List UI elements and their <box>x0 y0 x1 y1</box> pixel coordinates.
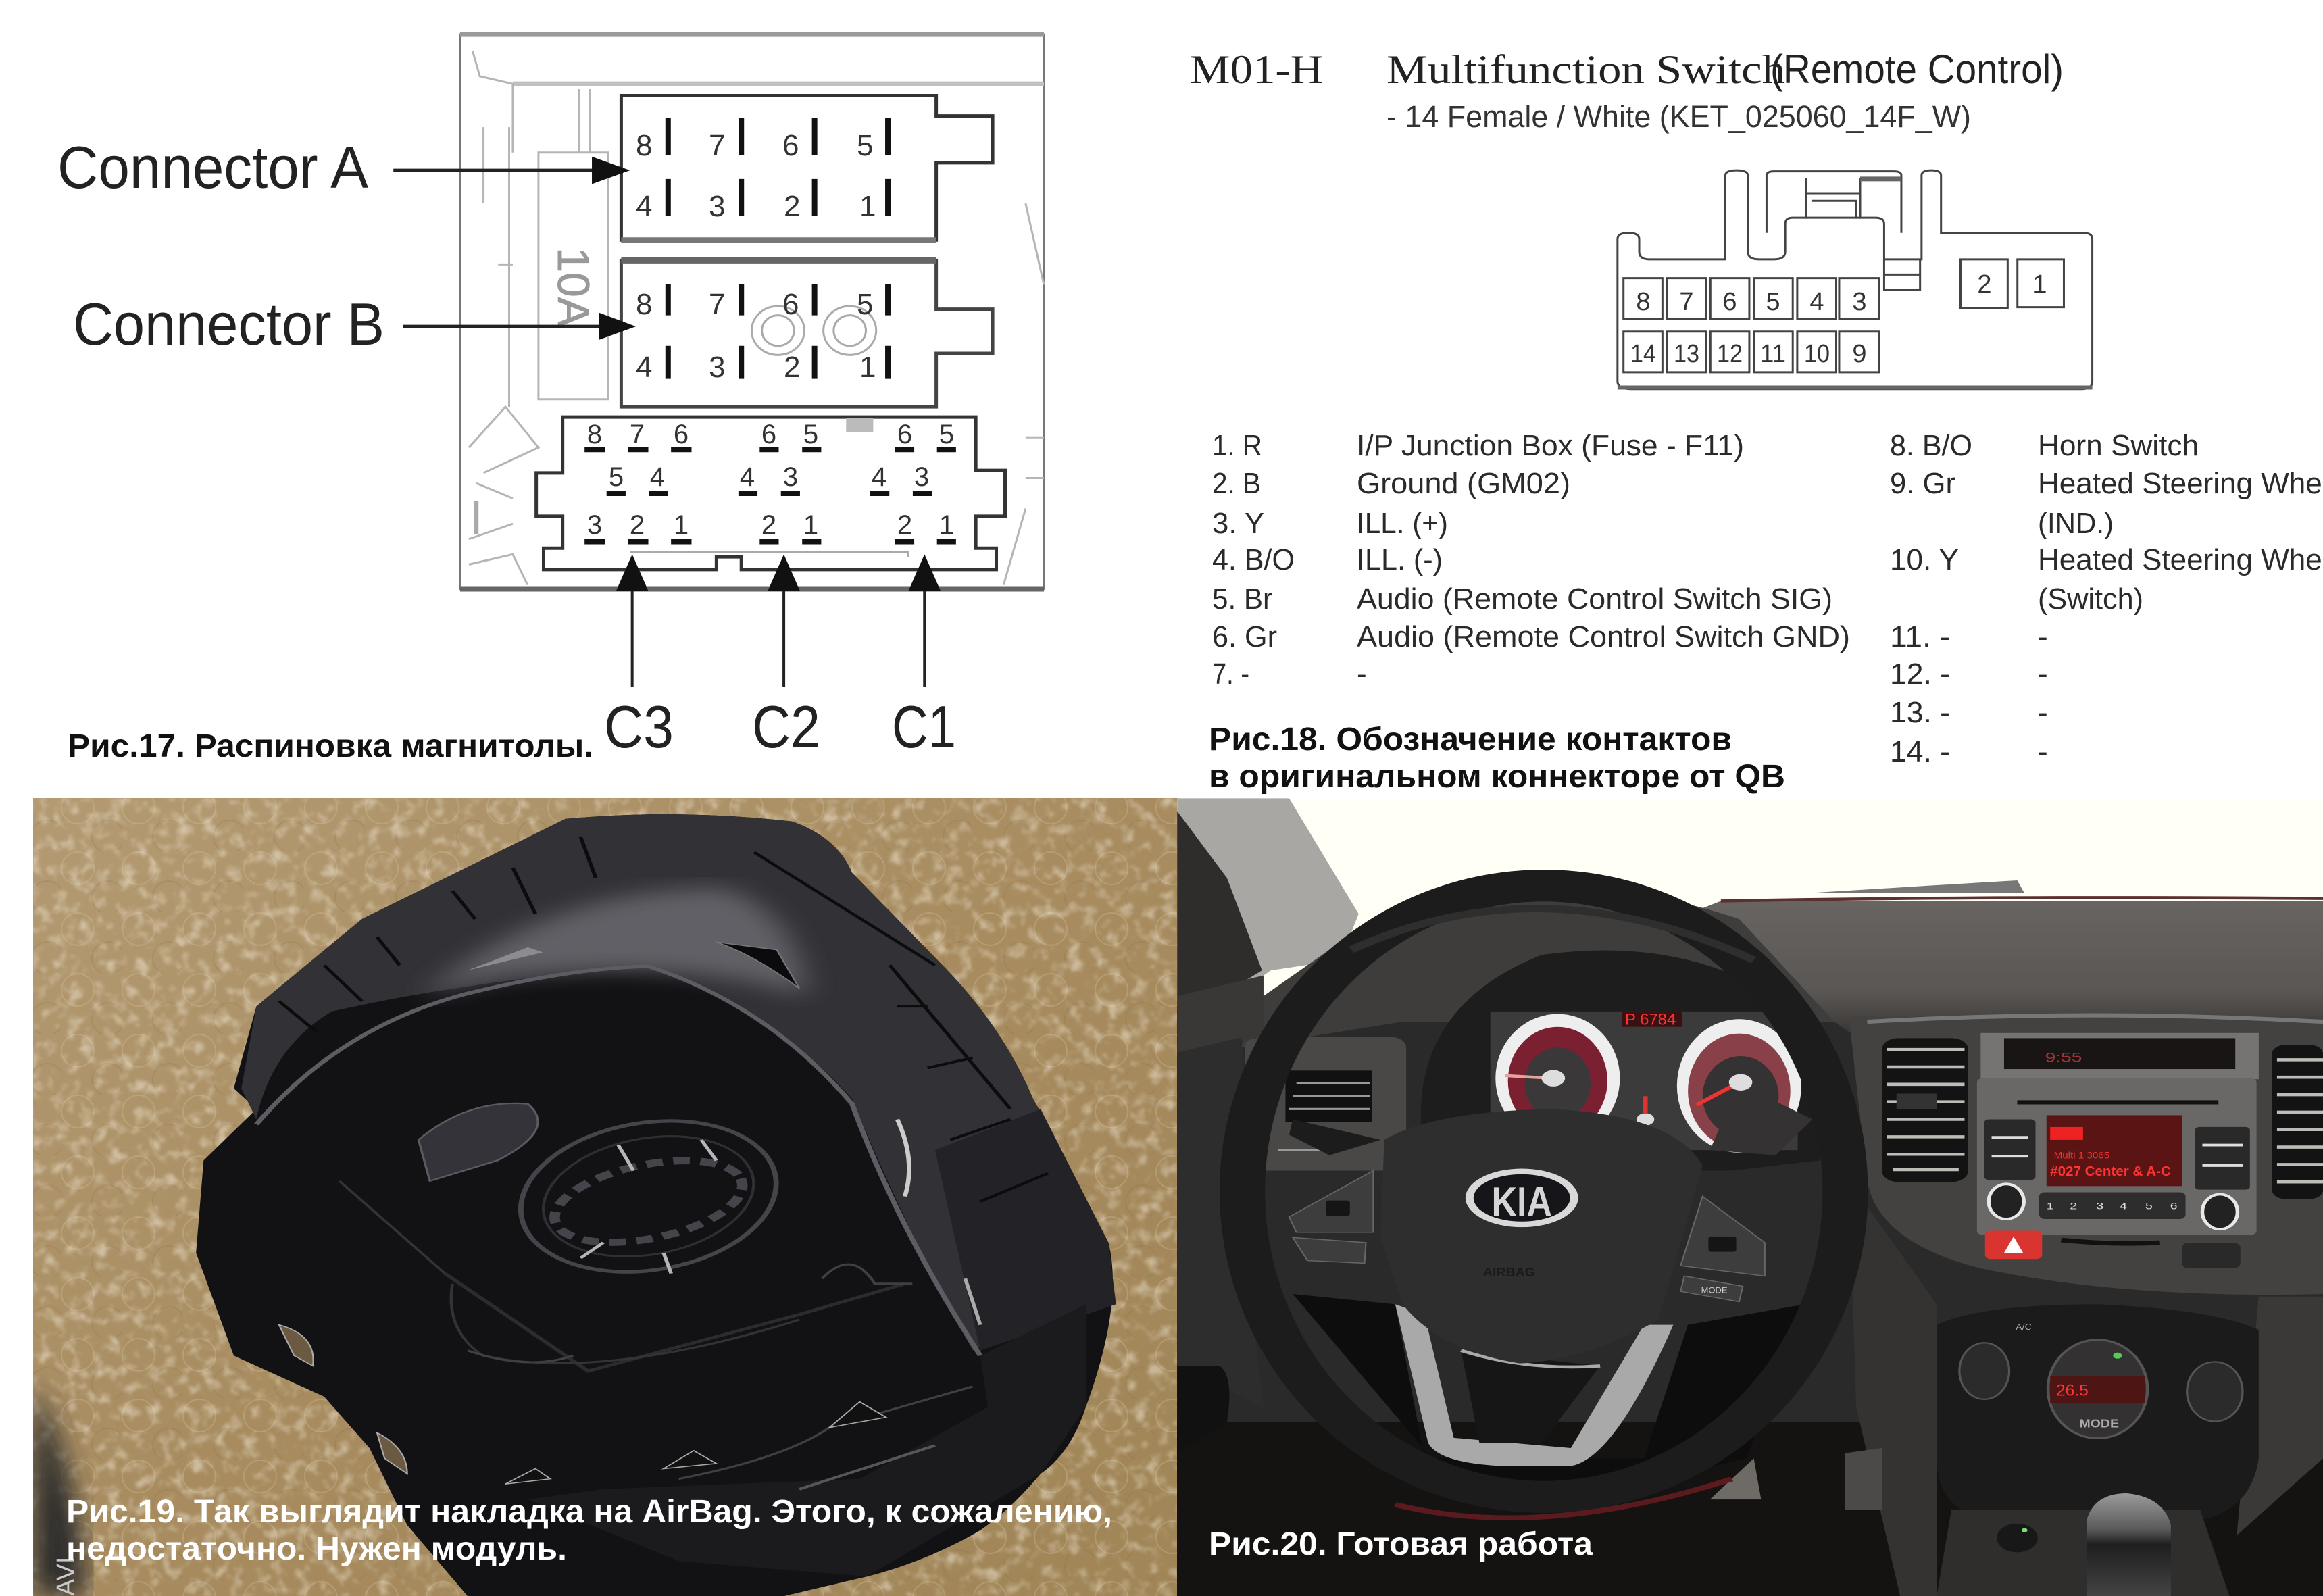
steering wheel hub <box>1289 1109 1765 1466</box>
radio head unit: 2 <box>2070 1201 2077 1212</box>
terminal numbers: 11 <box>1760 340 1786 368</box>
pin table: right column: Horn Switch <box>2038 429 2199 462</box>
climate control panel: A/C <box>2016 1322 2032 1332</box>
arrow: C2 <box>768 554 800 687</box>
console sides <box>1849 1181 1937 1596</box>
instrument binnacle <box>1421 951 1823 1171</box>
connector face diagram <box>1618 170 2093 389</box>
odometer display: P 6784 <box>1625 1011 1676 1029</box>
terminal numbers: 5 <box>1766 288 1780 316</box>
panel: photo of finished dashboard <box>1176 798 2323 1596</box>
connector C pin numbers: 4 <box>872 462 886 492</box>
connector A pin numbers: 2 <box>784 190 800 223</box>
pin table: right column: (IND.) <box>2038 507 2114 540</box>
heading: connector code: M01-H <box>1190 47 1323 92</box>
terminal numbers: 6 <box>1722 288 1737 316</box>
radio head unit: Multi 1 3065 <box>2054 1151 2109 1161</box>
pin table: right column: 12. - <box>1890 657 1950 691</box>
connector A pin numbers: 3 <box>709 190 725 223</box>
pin table: right column: (Switch) <box>2038 582 2143 616</box>
pin table: right column: - <box>2038 696 2048 729</box>
terminal numbers <box>1630 270 2047 368</box>
connector C pin numbers: 6 <box>674 420 689 449</box>
connector B pin numbers: 3 <box>709 351 725 384</box>
arrow: Connector A <box>393 157 630 184</box>
pin table: left column: I/P Junction Box (Fuse - F11) <box>1357 429 1744 462</box>
terminal numbers: 3 <box>1852 288 1867 316</box>
heading: connector name <box>1387 47 2064 92</box>
heading: connector name: Multifunction Switch <box>1387 47 1785 92</box>
radio head unit: 3 <box>2096 1201 2103 1212</box>
connector housing drawing <box>460 34 1044 589</box>
mounting slots <box>279 1325 886 1484</box>
door panel <box>1177 976 1264 1053</box>
terminal numbers: 14 <box>1630 340 1656 368</box>
pin table: left column: Audio (Remote Control Switch SIG) <box>1357 582 1832 616</box>
subheading: connector type: - 14 Female / White (KET_025060_14F_W) <box>1387 99 1971 134</box>
label: C3: C3 <box>604 693 674 760</box>
connector A pin numbers: 4 <box>636 190 652 223</box>
caption: figure 18: в оригинальном коннекторе от QB <box>1209 759 1785 795</box>
pin table: right column: - <box>2038 620 2048 653</box>
connector C pin numbers: 2 <box>630 510 645 540</box>
caption: figure 20: Рис.20. Готовая работа <box>1209 1526 1593 1562</box>
pin table: left column: ILL. (+) <box>1357 507 1448 540</box>
tachometer <box>1495 1014 1620 1115</box>
connector A pin numbers <box>636 129 876 223</box>
photo background: bubble wrap <box>33 798 1178 1596</box>
connector C pin numbers: 1 <box>674 510 689 540</box>
pin table: left column: 3. Y <box>1212 507 1264 540</box>
connector B pin numbers <box>636 288 876 384</box>
pin table: left column <box>1212 429 1850 691</box>
heading: connector name: (Remote Control) <box>1770 47 2064 92</box>
pin table: right column: 8. B/O <box>1890 429 1972 462</box>
pin table: left column: 5. Br <box>1212 582 1272 616</box>
dashboard top <box>1688 901 2323 1032</box>
connector B pin numbers: 6 <box>782 288 799 321</box>
terminal numbers: 2 <box>1977 270 1992 299</box>
airbag cover plastic shell <box>196 814 1116 1596</box>
connector C pin numbers: 2 <box>897 510 912 540</box>
radio head unit: 4 <box>2120 1201 2127 1212</box>
arrow: C3 <box>616 554 649 687</box>
radio head unit: 9:55 <box>2045 1050 2082 1065</box>
lower wheel well <box>1293 1294 1805 1505</box>
pin table: left column: 7. - <box>1212 657 1249 691</box>
caption: figure 19 <box>66 1494 1112 1567</box>
pin table: right column: 14. - <box>1890 735 1950 768</box>
hazard button <box>1985 1230 2042 1259</box>
terminal numbers: 9 <box>1852 340 1867 368</box>
climate control panel: MODE <box>2080 1416 2119 1430</box>
terminal numbers: 1 <box>2032 270 2047 299</box>
pin table: right column: 9. Gr <box>1890 467 1955 500</box>
pin table: right column: - <box>2038 657 2048 691</box>
connector C pin numbers: 3 <box>914 462 929 492</box>
arrow: C1 <box>908 554 941 687</box>
pin table: right column: 10. Y <box>1890 543 1959 576</box>
connector B pin numbers: 7 <box>709 288 725 321</box>
pin table: left column: Ground (GM02) <box>1357 467 1570 500</box>
gear shifter <box>1937 1493 2230 1596</box>
left vent and stalk <box>1245 1037 1406 1171</box>
pin table: right column <box>1890 429 2323 768</box>
connector C pin numbers: 7 <box>630 420 645 449</box>
radio head unit: #027 Center & A-C <box>2050 1164 2171 1179</box>
label: Connector B: Connector B <box>73 291 384 357</box>
connector B pin numbers: 2 <box>784 351 800 384</box>
connector C pin numbers: 5 <box>939 420 954 449</box>
connector C pin numbers: 1 <box>939 510 954 540</box>
connector C pin numbers: 2 <box>761 510 776 540</box>
label: Connector A: Connector A <box>57 134 368 201</box>
A-pillar <box>1177 798 1359 1006</box>
interior base <box>1177 996 2323 1423</box>
caption: figure 19: Рис.19. Так выглядит накладка на AirBag. Этого, к сожалению, <box>66 1494 1112 1530</box>
watermark corner: AVI <box>52 1557 80 1596</box>
terminal numbers: 8 <box>1636 288 1651 316</box>
pin table: right column: 11. - <box>1890 620 1950 653</box>
connector B pin numbers: 5 <box>857 288 873 321</box>
terminal numbers: 13 <box>1674 340 1699 368</box>
pin table: right column: 13. - <box>1890 696 1950 729</box>
caption: figure 18 <box>1209 722 1785 795</box>
panel: radio pinout diagram <box>57 34 1044 764</box>
smudge mark <box>418 1103 538 1181</box>
climate control panel: 26.5 <box>2056 1382 2089 1399</box>
connector C pin numbers: 1 <box>803 510 818 540</box>
connector A pin numbers: 6 <box>782 129 799 162</box>
AIRBAG mark: AIRBAG <box>1483 1266 1535 1280</box>
terminal numbers: 12 <box>1717 340 1743 368</box>
connector C pin numbers: 4 <box>650 462 665 492</box>
connector A pin numbers: 8 <box>636 129 652 162</box>
connector B pin numbers: 4 <box>636 351 652 384</box>
panel: photo of airbag cover <box>33 798 1178 1596</box>
terminal numbers: 7 <box>1679 288 1694 316</box>
terminal numbers: 10 <box>1804 340 1830 368</box>
connector C pin numbers <box>587 420 954 540</box>
pin table: left column: - <box>1357 657 1367 691</box>
label: C1: C1 <box>892 693 956 760</box>
embossed logo oval <box>518 1119 778 1274</box>
label: C2: C2 <box>752 693 820 760</box>
connector C pin numbers: 4 <box>740 462 755 492</box>
connector C pin numbers: 6 <box>761 420 776 449</box>
windshield sky <box>1177 798 2323 996</box>
pin table: left column: 2. B <box>1212 467 1261 500</box>
pin table: right column: - <box>2038 735 2048 768</box>
pin table: left column: 1. R <box>1212 429 1262 462</box>
console panel <box>1849 1016 2323 1295</box>
connector C pin numbers: 3 <box>783 462 798 492</box>
KIA emblem: KIA <box>1492 1178 1552 1225</box>
pin table: left column: 4. B/O <box>1212 543 1295 576</box>
pin table: left column: 6. Gr <box>1212 620 1277 653</box>
connector C pin numbers: 5 <box>609 462 624 492</box>
pedals and floor <box>1845 1448 1882 1510</box>
radio head unit <box>1977 1033 2259 1235</box>
connector C pin numbers: 5 <box>803 420 818 449</box>
climate control panel <box>1937 1304 2259 1520</box>
pin table: left column: ILL. (-) <box>1357 543 1443 576</box>
connector A pin numbers: 7 <box>709 129 725 162</box>
connector A pin numbers: 5 <box>857 129 873 162</box>
radio head unit: 1 <box>2047 1201 2054 1212</box>
caption: figure 18: Рис.18. Обозначение контактов <box>1209 722 1732 757</box>
radio head unit: 6 <box>2170 1201 2178 1212</box>
KIA emblem <box>1466 1169 1578 1227</box>
connector C pin numbers: 8 <box>587 420 602 449</box>
arrow: Connector B <box>403 313 636 340</box>
pin table: left column: Audio (Remote Control Switch GND) <box>1357 620 1850 653</box>
MODE button label: MODE <box>1701 1286 1728 1295</box>
terminal numbers: 4 <box>1809 288 1824 316</box>
caption: figure 19: недостаточно. Нужен модуль. <box>66 1531 567 1567</box>
caption: figure 17: Рис.17. Распиновка магнитолы. <box>68 728 593 764</box>
fuse label 10A: 10A <box>549 247 599 327</box>
radio head unit: 5 <box>2145 1201 2153 1212</box>
connector A pin numbers: 1 <box>859 190 876 223</box>
connector C pin numbers: 3 <box>587 510 602 540</box>
connector B pin numbers: 1 <box>859 351 876 384</box>
speedometer <box>1677 1019 1812 1155</box>
center vents <box>1882 1038 2323 1199</box>
connector C pin numbers: 6 <box>897 420 912 449</box>
connector B pin numbers: 8 <box>636 288 652 321</box>
steering wheel rim <box>1243 886 1845 1497</box>
panel: multifunction switch connector <box>1190 47 2323 795</box>
